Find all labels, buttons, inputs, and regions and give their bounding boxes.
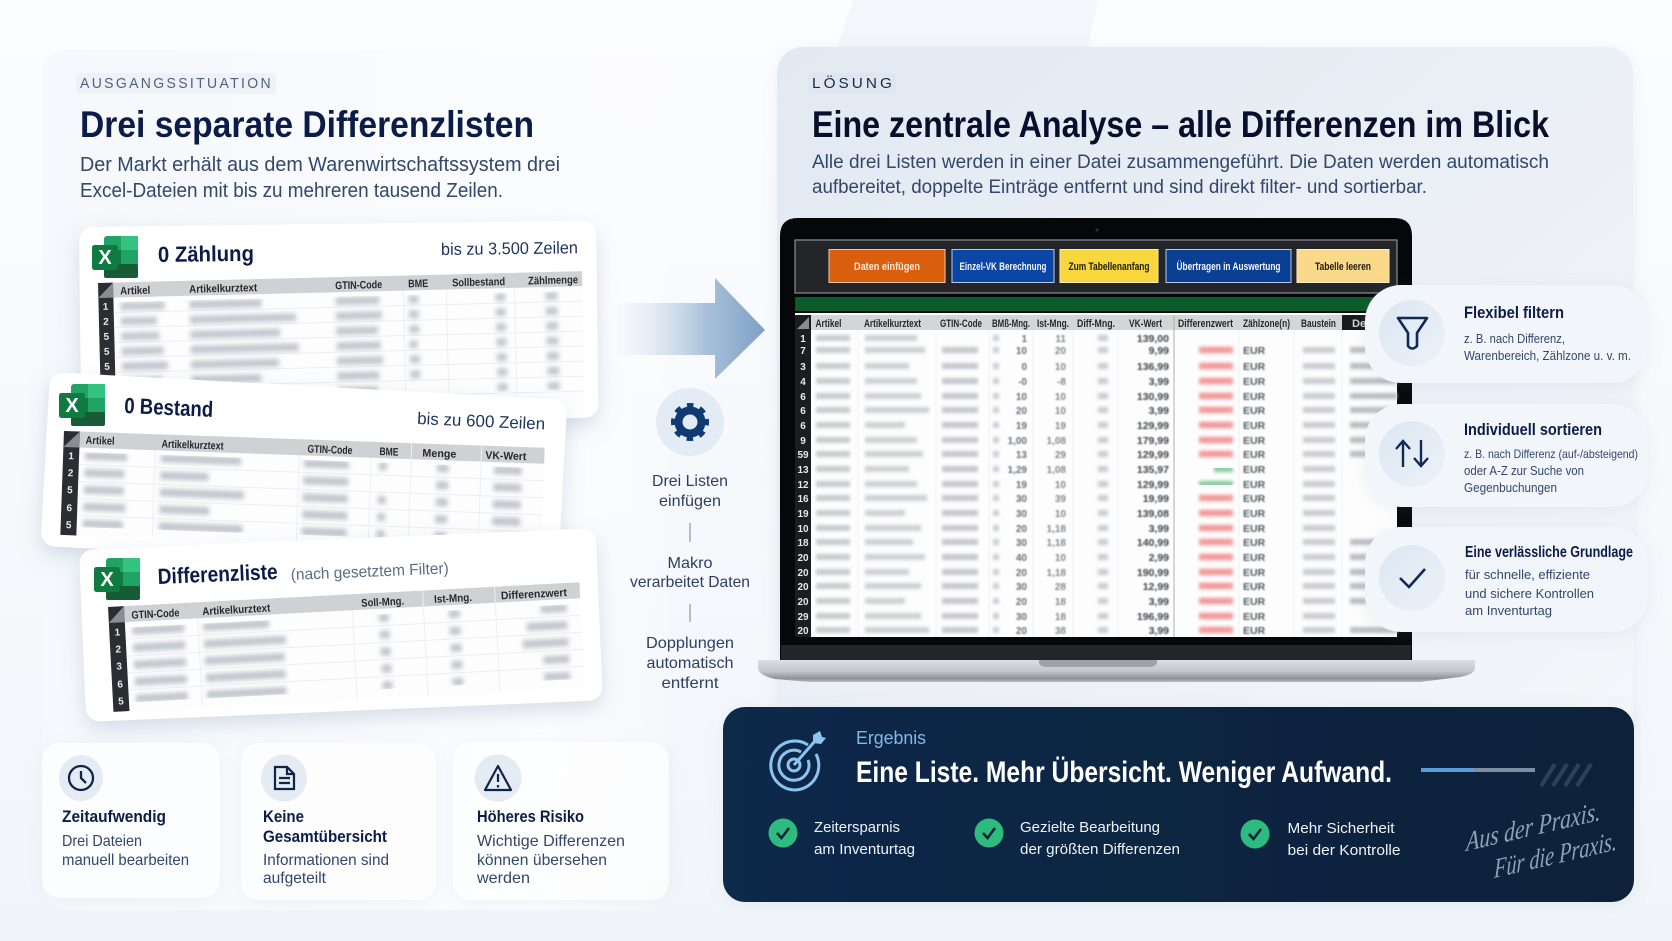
- heading: Lösung: [808, 73, 1549, 145]
- icon: target with arrow: [771, 731, 826, 790]
- icon: warning triangle: [474, 754, 522, 802]
- laptop base: [758, 658, 1475, 682]
- heading: Lösung: Eine zentrale Analyse – alle Differenzen im Blick: [812, 104, 1549, 145]
- table: Differenzliste: Differenzwert: [501, 587, 568, 602]
- table: Zählung: Artikelkurztext: [189, 282, 258, 296]
- spreadsheet: EUR: [1243, 567, 1266, 579]
- icon: Excel logo Zählung: [92, 236, 138, 278]
- text: Individuell sortieren: z. B. nach Differenz (auf-/absteigend): [1464, 447, 1638, 461]
- button: Daten einfügen: [829, 250, 945, 282]
- spreadsheet: 139,08: [1137, 508, 1169, 520]
- text: Eine verlässliche Grundlage: [1465, 544, 1633, 618]
- table: Bestand: Menge: [422, 448, 457, 461]
- table: Zählung: Artikel: [120, 285, 150, 297]
- text: Höheres Risiko: werden: [476, 870, 530, 887]
- heading: Ausgangssituation: Drei separate Differenzlisten: [80, 104, 534, 145]
- decorative progress line: [1421, 764, 1591, 786]
- panel: Ergebnis banner: [723, 707, 1634, 902]
- table: Differenzliste: [108, 582, 585, 713]
- text: process steps: Drei Listen: [652, 473, 728, 490]
- button: Einzel-VK Berechnung: Einzel-VK Berechnung: [960, 261, 1046, 273]
- spreadsheet: 20: [1016, 626, 1027, 637]
- text: Flexibel filtern: [1464, 303, 1631, 363]
- spreadsheet: 10: [1055, 362, 1066, 373]
- spreadsheet: 30: [1016, 509, 1027, 520]
- spreadsheet: 59: [797, 450, 809, 461]
- spreadsheet: 20: [797, 626, 809, 637]
- table: Zählung: GTIN-Code: [335, 279, 382, 292]
- spreadsheet: 139,00: [1137, 333, 1169, 345]
- spreadsheet: EUR: [1243, 493, 1266, 505]
- text: Flexibel filtern: Warenbereich, Zählzone u. v. m.: [1464, 348, 1631, 363]
- heading: Lösung: LÖSUNG: [812, 74, 895, 92]
- spreadsheet: 9,99: [1149, 345, 1169, 357]
- spreadsheet: 18: [1055, 612, 1066, 623]
- button: Daten einfügen: Daten einfügen: [854, 261, 920, 273]
- spreadsheet: 179,99: [1137, 435, 1169, 447]
- spreadsheet: 11: [1055, 334, 1066, 345]
- spreadsheet: 12,99: [1143, 581, 1169, 593]
- spreadsheet: 10: [1055, 480, 1066, 491]
- text: Individuell sortieren: oder A-Z zur Suche von: [1464, 463, 1584, 478]
- spreadsheet: 140,99: [1137, 537, 1169, 549]
- benefit: Mehr Sicherheit: Mehr Sicherheit: [1288, 820, 1395, 837]
- spreadsheet: 10: [1055, 392, 1066, 403]
- spreadsheet: [795, 313, 1397, 637]
- signature: Aus der Praxis: Aus der Praxis.: [1464, 796, 1601, 857]
- spreadsheet: EUR: [1243, 449, 1266, 461]
- button: Tabelle leeren: [1297, 250, 1389, 282]
- button: Zum Tabellenanfang: [1060, 250, 1158, 282]
- text: Keine Gesamtübersicht: [263, 807, 389, 887]
- button: Tabelle leeren: Tabelle leeren: [1315, 261, 1371, 273]
- spreadsheet: 16: [797, 494, 809, 505]
- text: Individuell sortieren: Gegenbuchungen: [1464, 480, 1557, 495]
- spreadsheet: 30: [1016, 612, 1027, 623]
- icon: sort arrows: [1379, 421, 1445, 487]
- spreadsheet: 29: [797, 612, 809, 623]
- spreadsheet: 1,18: [1047, 524, 1066, 535]
- icon: Excel logo Differenzliste: [94, 558, 140, 600]
- table: Bestand: [60, 431, 545, 552]
- table: Differenzliste: 6: [117, 679, 124, 691]
- spreadsheet: 10: [1055, 553, 1066, 564]
- text: Zeitaufwendig: Zeitaufwendig: [62, 807, 166, 826]
- spreadsheet: 6: [800, 406, 806, 417]
- spreadsheet: 3: [800, 362, 806, 373]
- spreadsheet: 4: [800, 377, 806, 388]
- icon: Excel logo Zählung: X: [98, 247, 112, 269]
- text: process steps: [630, 473, 750, 692]
- spreadsheet: EUR: [1243, 611, 1266, 623]
- spreadsheet: 129,99: [1137, 479, 1169, 491]
- spreadsheet: 10: [1055, 406, 1066, 417]
- spreadsheet: EUR: [1243, 596, 1266, 608]
- icon: Excel logo Bestand: X: [65, 395, 79, 417]
- spreadsheet: Ist-Mng.: [1037, 318, 1069, 330]
- spreadsheet: 19,99: [1143, 493, 1169, 505]
- spreadsheet: 38: [1055, 626, 1066, 637]
- spreadsheet: 13: [797, 465, 809, 476]
- text: Individuell sortieren: [1464, 420, 1638, 495]
- spreadsheet: 30: [1016, 538, 1027, 549]
- spreadsheet: 7: [800, 346, 806, 357]
- text: Flexibel filtern: Flexibel filtern: [1464, 303, 1564, 322]
- spreadsheet: 20: [797, 597, 809, 608]
- spreadsheet: 39: [1055, 494, 1066, 505]
- spreadsheet: EUR: [1243, 523, 1266, 535]
- spreadsheet: 1,00: [1008, 436, 1027, 447]
- laptop lid: [780, 218, 1412, 660]
- spreadsheet: 0: [1021, 362, 1027, 373]
- spreadsheet: 19: [1055, 421, 1066, 432]
- spreadsheet: EUR: [1243, 345, 1266, 357]
- table: Bestand: 6: [66, 503, 73, 514]
- spreadsheet: 136,99: [1137, 361, 1169, 373]
- laptop with Excel screen: [758, 218, 1475, 682]
- button: Übertragen in Auswertung: Übertragen in Auswertung: [1176, 260, 1280, 273]
- panel: card 0 Zählung: [79, 221, 598, 424]
- heading: Ausgangssituation: AUSGANGSSITUATION: [80, 75, 273, 92]
- panel: Lösung background: [777, 47, 1633, 737]
- spreadsheet: 20: [1016, 406, 1027, 417]
- spreadsheet: EUR: [1243, 625, 1266, 637]
- spreadsheet: 6: [800, 421, 806, 432]
- text: Eine verlässliche Grundlage: für schnelle, effiziente: [1465, 567, 1590, 582]
- text: Höheres Risiko: [476, 807, 625, 887]
- panel: card Differenzliste: [79, 528, 603, 722]
- table: Zählung: [98, 271, 585, 422]
- benefit: Zeitersparnis: am Inventurtag: [814, 841, 915, 858]
- button: Zum Tabellenanfang: Zum Tabellenanfang: [1068, 261, 1150, 273]
- spreadsheet: EUR: [1243, 420, 1266, 432]
- table: Bestand: 2: [68, 468, 74, 479]
- text: Ausgangssituation intro: Excel-Dateien mit bis zu mehreren tausend Zeilen.: [80, 180, 503, 202]
- text: Eine verlässliche Grundlage: am Inventurtag: [1465, 603, 1552, 618]
- table: Differenzliste: Ist-Mng.: [434, 592, 472, 606]
- spreadsheet: EUR: [1243, 376, 1266, 388]
- panel: card 0 Bestand: [41, 372, 567, 574]
- spreadsheet: Artikel: [816, 318, 842, 330]
- text: process steps: einfügen: [659, 493, 721, 510]
- spreadsheet: 18: [1055, 597, 1066, 608]
- spreadsheet: EUR: [1243, 581, 1266, 593]
- benefit: Gezielte Bearbeitung: [974, 818, 1180, 858]
- spreadsheet: 9: [800, 436, 806, 447]
- green ribbon bar: [795, 297, 1397, 311]
- text: Keine Gesamtübersicht: aufgeteilt: [263, 870, 327, 887]
- table: Zählung: 2: [103, 317, 109, 328]
- spreadsheet: 1: [1021, 334, 1027, 345]
- spreadsheet: 18: [797, 538, 809, 549]
- spreadsheet: 135,97: [1137, 464, 1169, 476]
- table: Differenzliste: Artikelkurztext: [202, 603, 271, 618]
- text: Lösung intro: Alle drei Listen werden in einer Datei zusammengeführt. Die Daten werden automatisch: [812, 152, 1549, 173]
- benefit: Mehr Sicherheit: [1240, 820, 1400, 859]
- spreadsheet: 1,18: [1047, 538, 1066, 549]
- spreadsheet: EUR: [1243, 552, 1266, 564]
- spreadsheet: 6: [800, 392, 806, 403]
- spreadsheet: 1,18: [1047, 568, 1066, 579]
- card title: 0 Bestand: 0 Bestand: [124, 393, 214, 422]
- text: Höheres Risiko: können übersehen: [477, 852, 607, 869]
- spreadsheet: 129,99: [1137, 420, 1169, 432]
- spreadsheet: 20: [797, 553, 809, 564]
- spreadsheet: 19: [797, 509, 809, 520]
- spreadsheet: 196,99: [1137, 611, 1169, 623]
- table: Differenzliste: GTIN-Code: [131, 607, 180, 622]
- spreadsheet: 19: [1016, 421, 1027, 432]
- spreadsheet: 3,99: [1149, 405, 1169, 417]
- panel: Flexibel filtern: [1365, 285, 1648, 383]
- table: Bestand: 5: [66, 520, 72, 531]
- button: Einzel-VK Berechnung: [952, 250, 1054, 282]
- text: Höheres Risiko: Höheres Risiko: [477, 807, 584, 826]
- text: Keine Gesamtübersicht: Keine: [263, 807, 304, 826]
- table: Bestand: 1: [68, 451, 74, 462]
- spreadsheet: 3,99: [1149, 376, 1169, 388]
- spreadsheet: 20: [1016, 597, 1027, 608]
- text: Ausgangssituation intro: Der Markt erhält aus dem Warenwirtschaftssystem drei: [80, 154, 560, 176]
- spreadsheet: -0: [1018, 377, 1027, 388]
- spreadsheet: Zählzone(n): [1243, 318, 1290, 330]
- text: Keine Gesamtübersicht: Informationen sind: [263, 852, 389, 869]
- spreadsheet: 129,99: [1137, 449, 1169, 461]
- icon: gear: [656, 388, 724, 456]
- text: process steps: verarbeitet Daten: [630, 574, 750, 591]
- spreadsheet: 1,08: [1047, 465, 1066, 476]
- spreadsheet: 3,99: [1149, 523, 1169, 535]
- signature: Aus der Praxis: Für die Praxis.: [1493, 825, 1617, 884]
- spreadsheet: 12: [797, 480, 809, 491]
- table: Zählung: 5: [103, 332, 110, 343]
- spreadsheet: 130,99: [1137, 391, 1169, 403]
- benefit: Gezielte Bearbeitung: Gezielte Bearbeitung: [1020, 819, 1160, 836]
- icon: clock: [59, 755, 103, 801]
- spreadsheet: Dest: [1352, 318, 1376, 330]
- spreadsheet: 3,99: [1149, 596, 1169, 608]
- label: row count Bestand: bis zu 600 Zeilen: [417, 409, 546, 434]
- panel: card Zeitaufwendig: [42, 743, 220, 898]
- signature: Aus der Praxis: [1464, 796, 1617, 884]
- benefit: Zeitersparnis: [768, 818, 915, 858]
- text: process steps: Dopplungen: [646, 635, 734, 652]
- panel: card Höheres Risiko: [453, 742, 669, 900]
- text: Zeitaufwendig: Drei Dateien: [62, 833, 142, 850]
- icon: Excel logo Bestand: [59, 384, 105, 426]
- benefit: Mehr Sicherheit: bei der Kontrolle: [1288, 842, 1400, 859]
- spreadsheet: Baustein: [1301, 318, 1336, 330]
- heading: Ausgangssituation: [76, 73, 534, 145]
- table: Zählung: Zählmenge: [528, 274, 578, 287]
- button: Übertragen in Auswertung: [1166, 250, 1291, 282]
- spreadsheet: 1: [800, 334, 806, 345]
- table: Zählung: 5: [104, 362, 110, 373]
- spreadsheet: 10: [1055, 509, 1066, 520]
- icon: funnel: [1379, 300, 1445, 366]
- spreadsheet: 40: [1016, 553, 1027, 564]
- spreadsheet: 13: [1016, 450, 1027, 461]
- spreadsheet: 10: [1016, 392, 1027, 403]
- spreadsheet: 190,99: [1137, 567, 1169, 579]
- table: Differenzliste: 5: [118, 696, 124, 708]
- text: process steps: entfernt: [662, 675, 719, 692]
- spreadsheet: 20: [1055, 346, 1066, 357]
- table: Differenzliste: 1: [114, 627, 121, 639]
- text: Individuell sortieren: Individuell sortieren: [1464, 420, 1602, 439]
- table: Bestand: Artikelkurztext: [161, 438, 224, 453]
- spreadsheet: 3,99: [1149, 625, 1169, 637]
- spreadsheet: BMß-Mng.: [992, 318, 1030, 330]
- icon: check mark: [1379, 545, 1445, 611]
- spreadsheet: 20: [797, 582, 809, 593]
- table: Differenzliste: 3: [116, 661, 123, 673]
- spreadsheet: 20: [1016, 568, 1027, 579]
- panel: Individuell sortieren: [1365, 404, 1648, 507]
- card title: 0 Zählung: 0 Zählung: [158, 241, 254, 267]
- benefit: Zeitersparnis: Zeitersparnis: [814, 819, 900, 836]
- spreadsheet: GTIN-Code: [940, 318, 982, 330]
- spreadsheet: 28: [1055, 582, 1066, 593]
- label: Ergebnis: Ergebnis: [856, 728, 926, 748]
- text: Lösung intro: [812, 152, 1549, 198]
- arrow: big process arrow: [617, 278, 765, 379]
- label: row count Zählung: bis zu 3.500 Zeilen: [441, 238, 578, 259]
- text: Keine Gesamtübersicht: Gesamtübersicht: [263, 827, 387, 846]
- spreadsheet: EUR: [1243, 508, 1266, 520]
- panel: Eine verlässliche Grundlage: [1365, 527, 1648, 632]
- table: Bestand: Artikel: [85, 435, 115, 448]
- text: process steps: Makro: [668, 555, 713, 572]
- spreadsheet: 19: [1016, 480, 1027, 491]
- spreadsheet: EUR: [1243, 479, 1266, 491]
- label: filter note: (nach gesetztem Filter): [290, 560, 449, 584]
- spreadsheet: 2,99: [1149, 552, 1169, 564]
- table: Bestand: VK-Wert: [485, 450, 527, 463]
- text: Flexibel filtern: z. B. nach Differenz,: [1464, 331, 1565, 346]
- spreadsheet: EUR: [1243, 435, 1266, 447]
- benefit: Gezielte Bearbeitung: der größten Differenzen: [1020, 841, 1180, 858]
- card title: Differenzliste: Differenzliste: [157, 559, 278, 589]
- spreadsheet: EUR: [1243, 405, 1266, 417]
- spreadsheet: 10: [1016, 346, 1027, 357]
- text: Lösung intro: aufbereitet, doppelte Einträge entfernt und sind direkt filter- und sortierbar.: [812, 177, 1427, 198]
- spreadsheet: Artikelkurztext: [864, 318, 921, 330]
- icon: Excel logo Differenzliste: X: [100, 569, 114, 591]
- spreadsheet: Diff-Mng.: [1077, 318, 1115, 330]
- spreadsheet: EUR: [1243, 391, 1266, 403]
- icon: document: [261, 754, 307, 802]
- text: Höheres Risiko: Wichtige Differenzen: [477, 833, 625, 850]
- table: Bestand: 5: [67, 485, 73, 496]
- table: Bestand: GTIN-Code: [307, 444, 353, 457]
- toolbar with macro buttons: [795, 240, 1397, 293]
- headline: result claim: Eine Liste. Mehr Übersicht. Weniger Aufwand.: [856, 756, 1392, 789]
- table: Zählung: 5: [104, 347, 110, 358]
- text: Zeitaufwendig: [62, 807, 189, 869]
- text: Ausgangssituation intro: [80, 154, 560, 202]
- panel: Ausgangssituation background: [43, 50, 668, 910]
- text: Eine verlässliche Grundlage: und sichere Kontrollen: [1465, 586, 1594, 601]
- table: Zählung: Sollbestand: [452, 276, 505, 289]
- spreadsheet: 10: [797, 524, 809, 535]
- text: Zeitaufwendig: manuell bearbeiten: [62, 852, 189, 869]
- spreadsheet: 30: [1016, 582, 1027, 593]
- spreadsheet: EUR: [1243, 361, 1266, 373]
- spreadsheet: 1,08: [1047, 436, 1066, 447]
- spreadsheet: 29: [1055, 450, 1066, 461]
- spreadsheet: -8: [1057, 377, 1066, 388]
- table: Zählung: BME: [408, 278, 428, 290]
- spreadsheet: VK-Wert: [1129, 318, 1162, 330]
- table: Differenzliste: 2: [115, 644, 122, 656]
- spreadsheet: EUR: [1243, 464, 1266, 476]
- spreadsheet: Differenzwert: [1178, 318, 1233, 330]
- spreadsheet: EUR: [1243, 537, 1266, 549]
- table: Bestand: BME: [379, 446, 399, 459]
- spreadsheet: 1,29: [1008, 465, 1027, 476]
- panel: card Keine Gesamtübersicht: [241, 743, 436, 900]
- spreadsheet: 30: [1016, 494, 1027, 505]
- spreadsheet: 20: [1016, 524, 1027, 535]
- table: Differenzliste: Soll-Mng.: [361, 596, 404, 610]
- table: Zählung: 1: [103, 302, 109, 313]
- text: process steps: automatisch: [646, 655, 734, 672]
- spreadsheet: 20: [797, 568, 809, 579]
